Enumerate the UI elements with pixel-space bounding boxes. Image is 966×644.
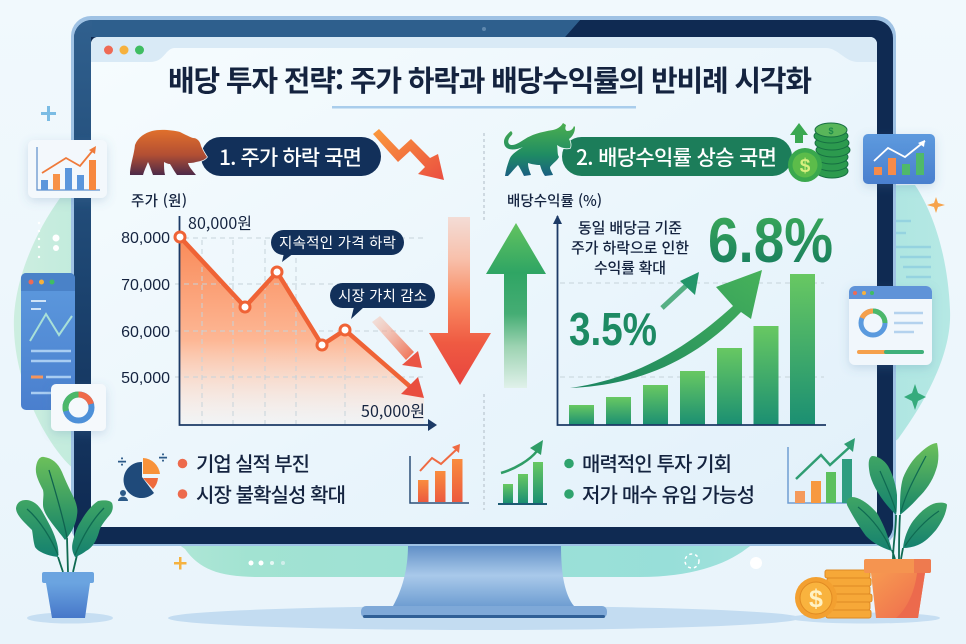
title: 배당 투자 전략: 주가 하락과 배당수익률의 반비례 시각화 xyxy=(168,58,812,100)
icon: pie chart xyxy=(118,450,168,501)
widget: left blue document panel xyxy=(21,273,75,410)
faint lines on right backdrop xyxy=(896,221,931,277)
icon: up arrow and coins: $ xyxy=(828,126,834,136)
icon: small green bar chart xyxy=(498,440,547,505)
icon: pie chart: ÷ xyxy=(118,454,127,471)
monitor frame xyxy=(71,16,896,546)
callout: market value decrease: 시장 가치 감소 xyxy=(338,285,427,306)
icon: bear xyxy=(130,130,207,175)
bar chart: dividend yield xyxy=(553,215,826,425)
line chart: stock price xyxy=(121,210,437,431)
list: decline causes: 시장 불확실성 확대 xyxy=(196,479,346,508)
big red down arrow xyxy=(429,217,491,385)
panel: stock price decline xyxy=(118,129,469,508)
big green up arrow xyxy=(486,223,546,388)
value 3.5%: 3.5% xyxy=(569,303,657,355)
callout: market value decrease xyxy=(330,283,435,319)
line chart: stock price: 60,000 xyxy=(121,324,170,341)
sparkles and dots on background xyxy=(38,106,945,570)
panel: dividend yield rise xyxy=(498,123,855,508)
section 1 heading pill: 1. 주가 하락 국면 xyxy=(219,142,362,172)
widget: right blue chart card xyxy=(863,134,935,184)
list: decline causes: 기업 실적 부진 xyxy=(196,448,310,477)
line chart: stock price: 80,000원 xyxy=(188,210,252,234)
coins and right plant: $ xyxy=(809,585,823,613)
coins and right plant xyxy=(790,443,947,624)
section 2 heading pill: 2. 배당수익률 상승 국면 xyxy=(576,142,777,172)
widget: left chart card xyxy=(28,140,107,198)
list: investment opportunities: 저가 매수 유입 가능성 xyxy=(582,479,755,508)
annotation text: 수익률 확대 xyxy=(594,257,666,278)
line chart: stock price: 80,000 xyxy=(121,230,170,247)
monitor stand xyxy=(361,545,607,618)
list: investment opportunities: 매력적인 투자 기회 xyxy=(582,448,732,477)
left plant xyxy=(16,457,113,624)
curved growth arrow xyxy=(570,270,762,388)
y axis title: 주가 (원) xyxy=(131,190,187,211)
background teal blob xyxy=(14,185,950,630)
line chart: stock price: 70,000 xyxy=(121,277,170,294)
icon: mixed bar and line chart xyxy=(788,438,855,503)
title underline xyxy=(332,106,636,108)
annotation text: 주가 하락으로 인한 xyxy=(571,237,689,258)
line chart: stock price: 50,000 xyxy=(121,370,170,387)
callout: continuous price decline: 지속적인 가격 하락 xyxy=(279,232,396,253)
list: decline causes xyxy=(178,448,346,508)
icon: up arrow and coins xyxy=(788,123,850,182)
list: investment opportunities xyxy=(564,448,755,508)
callout: continuous price decline xyxy=(271,230,404,262)
monitor screen xyxy=(91,37,877,527)
annotation text xyxy=(571,217,689,278)
section 1 heading pill xyxy=(201,137,381,176)
small growth arrow xyxy=(662,272,699,308)
icon: bull xyxy=(504,123,575,176)
icon: pie chart: ÷ xyxy=(159,450,168,467)
icon: zigzag down arrow xyxy=(373,129,444,180)
window buttons xyxy=(104,46,144,54)
widget: right donut card xyxy=(849,286,932,365)
icon: small orange bar chart xyxy=(410,444,469,503)
annotation text: 동일 배당금 기준 xyxy=(578,217,682,238)
center dashed divider xyxy=(483,133,485,510)
line chart: stock price: 50,000원 xyxy=(361,398,425,422)
y axis title: 배당수익률 (%) xyxy=(507,190,602,211)
big value 6.8%: 6.8% xyxy=(708,206,833,276)
icon: up arrow and coins: $ xyxy=(800,156,811,177)
section 2 heading pill xyxy=(562,137,792,176)
widget: left donut card xyxy=(51,384,106,431)
